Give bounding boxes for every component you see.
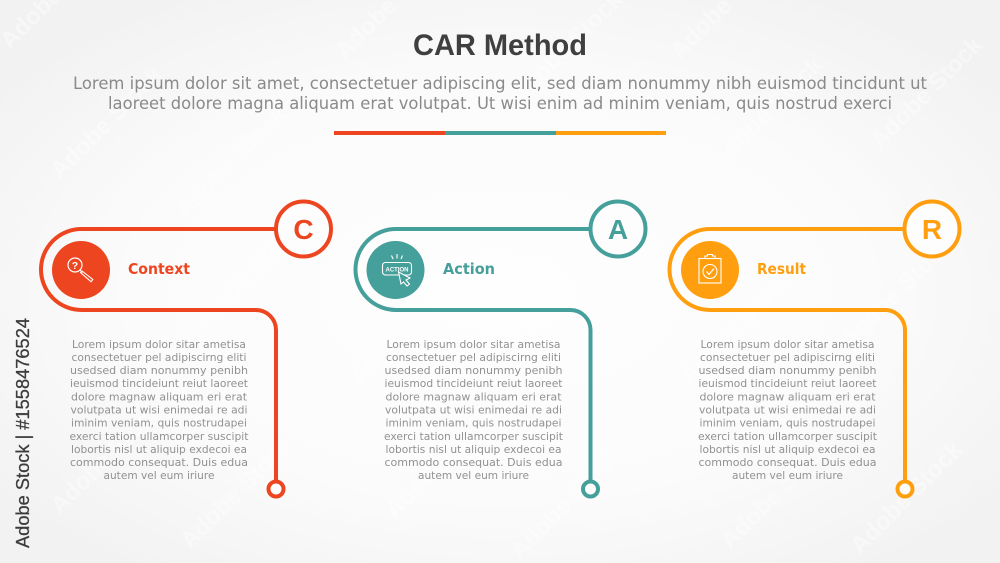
- text: Adobe Stock: [865, 31, 988, 154]
- text: Adobe Stock: [345, 266, 468, 389]
- letter badge: C: C: [293, 214, 314, 245]
- text: Adobe Stock: [185, 216, 308, 339]
- body text: context: autem vel eum iriure: [104, 469, 215, 482]
- body text: result: ieuismod tincideiunt reiut laoreet: [698, 377, 877, 390]
- end node: [898, 482, 912, 496]
- text: Adobe Stock: [845, 436, 968, 559]
- icon: magnifier with question mark: ?: [72, 260, 78, 272]
- text: Adobe Stock: [505, 441, 628, 563]
- heading: Result: Result: [757, 260, 807, 278]
- panel: context: [41, 202, 331, 496]
- icon: action button with cursor: ACTION: [386, 268, 408, 274]
- body text: action: autem vel eum iriure: [418, 469, 529, 482]
- body text: context: ieuismod tincideiunt reiut laoreet: [70, 377, 249, 390]
- body text: action: volutpata ut wisi enimedai re adi: [385, 404, 562, 416]
- letter badge: A: [590, 202, 646, 256]
- body text: action: ieuismod tincideiunt reiut laoreet: [384, 377, 563, 390]
- body text: context: usedsed diam nonummy penibh: [70, 364, 248, 377]
- body text: action: [384, 338, 564, 482]
- body text: result: consectetuer pel adipiscirng eliti: [700, 351, 875, 364]
- body text: context: consectetuer pel adipiscirng eliti: [72, 351, 246, 364]
- vertical stock credit: Adobe Stock | #1558476524: [12, 318, 33, 548]
- body text: context: iminim veniam, quis nostrudapei: [71, 416, 247, 430]
- body text: result: usedsed diam nonummy penibh: [698, 364, 877, 377]
- connector line: action: [356, 229, 590, 482]
- letter badge: C: [276, 202, 331, 256]
- body text: action: iminim veniam, quis nostrudapei: [386, 416, 562, 430]
- letter badge: A: A: [608, 214, 628, 245]
- heading: Action: Action: [443, 260, 495, 278]
- panel: action: [356, 202, 646, 496]
- connector line: context: [41, 229, 276, 482]
- tricolor heading rule: [334, 131, 666, 135]
- body text: context: volutpata ut wisi enimedai re adi: [70, 404, 248, 416]
- body text: result: volutpata ut wisi enimedai re adi: [699, 404, 876, 416]
- body text: result: autem vel eum iriure: [732, 469, 843, 482]
- icon: clipboard with check: [681, 241, 739, 299]
- body text: result: [698, 338, 878, 482]
- text: Adobe Stock: [380, 401, 503, 524]
- body text: context: commodo consequat. Duis edua: [70, 456, 248, 469]
- text: Adobe Stock: [715, 431, 838, 554]
- body text: action: usedsed diam nonummy penibh: [384, 364, 563, 377]
- text: Adobe Stock: [515, 216, 638, 339]
- connector line: result: [670, 229, 905, 482]
- body text: result: Lorem ipsum dolor sitar ametisa: [700, 338, 874, 351]
- body text: result: lobortis nisl ut aliquip exdecoi ea: [700, 443, 876, 456]
- text: Adobe Stock: [45, 396, 168, 519]
- body text: result: dolore magnaw aliquam eri erat: [700, 390, 876, 404]
- body text: context: [70, 338, 249, 482]
- body text: action: lobortis nisl ut aliquip exdecoi ea: [386, 443, 562, 456]
- text: Adobe Stock: [835, 231, 958, 354]
- letter badge: R: R: [922, 214, 942, 245]
- text: Adobe Stock: [175, 431, 298, 554]
- body text: context: dolore magnaw aliquam eri erat: [71, 390, 248, 404]
- body text: context: lobortis nisl ut aliquip exdecoi ea: [71, 443, 247, 456]
- icon: action button with cursor: [366, 241, 424, 299]
- body text: result: commodo consequat. Duis edua: [698, 456, 876, 469]
- body text: context: Lorem ipsum dolor sitar ametisa: [72, 338, 246, 351]
- end node: [268, 482, 284, 496]
- letter badge: R: [904, 202, 960, 256]
- text: Adobe Stock: [705, 51, 828, 174]
- body text: action: exerci tation ullamcorper suscipit: [384, 430, 564, 443]
- body text: action: dolore magnaw aliquam eri erat: [386, 390, 562, 404]
- subtitle text block: laoreet dolore magna aliquam erat volutpat. Ut wisi enim ad minim veniam, quis nostrud exerci: [108, 94, 892, 114]
- subtitle text block: [73, 74, 927, 114]
- body text: context: exerci tation ullamcorper suscipit: [70, 430, 249, 443]
- body text: action: commodo consequat. Duis edua: [384, 456, 562, 469]
- heading: Context: Context: [128, 260, 191, 278]
- text: Adobe Stock: [45, 61, 168, 184]
- subtitle text block: Lorem ipsum dolor sit amet, consectetuer adipiscing elit, sed diam nonummy nibh euismod tincidunt ut: [73, 74, 927, 94]
- body text: result: exerci tation ullamcorper suscipit: [698, 430, 878, 443]
- end node: [583, 482, 598, 496]
- text: Adobe Stock: [675, 266, 798, 389]
- body text: action: consectetuer pel adipiscirng eliti: [386, 351, 561, 364]
- body text: action: Lorem ipsum dolor sitar ametisa: [386, 338, 560, 351]
- text: Adobe Stock: [170, 101, 293, 224]
- panel: result: [670, 202, 960, 496]
- title: CAR Method: [413, 29, 587, 62]
- icon: magnifier with question mark: [52, 241, 110, 299]
- body text: result: iminim veniam, quis nostrudapei: [700, 416, 876, 430]
